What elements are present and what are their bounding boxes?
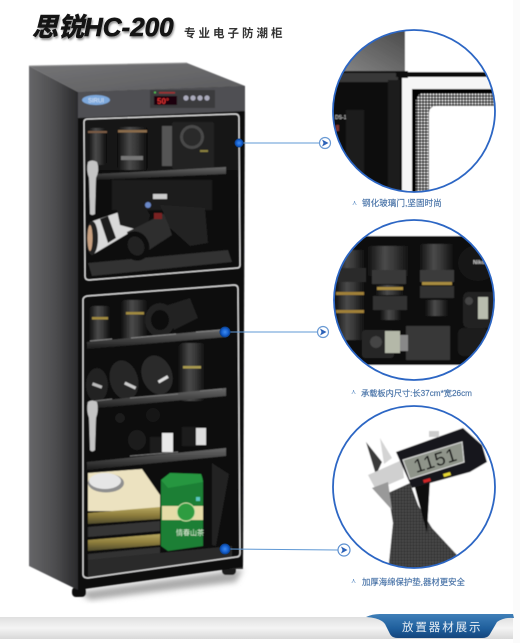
shelf row 1 lenses <box>90 305 110 341</box>
bottom floor <box>88 546 232 578</box>
circle 1: tempered glass door detail: DS-1 <box>335 115 347 121</box>
circle 3: caliper and foam detail: 1151 <box>411 445 460 478</box>
connector 2 <box>220 326 328 338</box>
cabinet <box>29 63 245 600</box>
shelf 3 <box>87 448 226 470</box>
cabinet top <box>29 63 245 92</box>
circle 3: caliper and foam detail <box>330 400 500 572</box>
caption 3: ⋏ <box>351 578 356 585</box>
inner door panel <box>212 463 229 546</box>
caption 2: ⋏ <box>351 389 356 396</box>
circle 2: shelf detail <box>330 220 500 380</box>
foot right <box>213 565 243 575</box>
shelf 2 <box>87 388 226 409</box>
connector 1 <box>234 138 330 148</box>
green tea tin <box>161 473 204 551</box>
banner label: 放置器材展示 <box>402 620 482 634</box>
title: 思锐HC-200 <box>32 12 174 42</box>
caption 2: 承载板内尺寸:长37cm*宽26cm <box>361 388 472 398</box>
caption 1: 钢化玻璃门,坚固时尚 <box>362 197 442 208</box>
title: 思锐HC-200 <box>33 14 175 44</box>
top shelf lenses <box>88 128 107 165</box>
cabinet side <box>29 66 78 590</box>
black lens <box>126 213 172 261</box>
connector 3 <box>220 544 350 556</box>
lower door <box>83 285 240 578</box>
caption 3: 加厚海绵保护垫,器材更安全 <box>362 577 465 587</box>
upper door handle <box>87 160 98 215</box>
shelf row 3 flashes <box>115 408 206 455</box>
floor shadow <box>78 569 243 600</box>
shelf row 2 lenses <box>86 368 108 402</box>
control panel <box>150 90 215 108</box>
circle 2: shelf detail: Nikon <box>473 260 489 266</box>
camera body 1 <box>116 208 150 230</box>
white telephoto lens <box>86 209 134 255</box>
caliper jaws <box>366 442 382 475</box>
caption 1: ⋏ <box>352 200 357 207</box>
control header <box>78 86 245 118</box>
camera body 2 <box>145 194 208 246</box>
top shelf camera <box>162 122 214 169</box>
shelf upper door <box>96 167 226 180</box>
caliper body <box>396 428 487 488</box>
shelf 1 <box>87 329 226 349</box>
lower door handle <box>87 400 98 452</box>
control panel: 50° <box>157 97 169 106</box>
foot left <box>72 587 86 597</box>
cream box stack <box>88 469 160 563</box>
upper door <box>84 114 240 280</box>
brand badge <box>82 95 110 105</box>
circle 1: tempered glass door detail <box>332 29 496 193</box>
foam <box>388 483 457 572</box>
green tea tin: 情春山茶 <box>176 528 204 537</box>
bottom banner <box>0 614 514 639</box>
brand badge: SIRUI <box>88 98 104 104</box>
cabinet front <box>78 86 245 590</box>
subtitle: 专业电子防潮柜 <box>184 26 286 40</box>
